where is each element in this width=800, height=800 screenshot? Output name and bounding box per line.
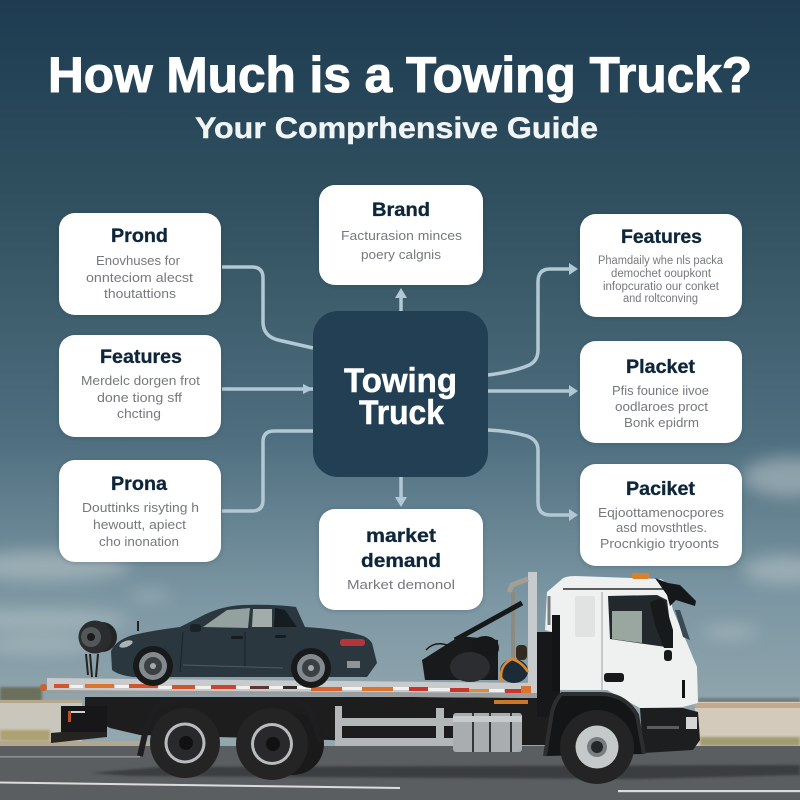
horizon: wall and scrub bbox=[0, 687, 800, 750]
connectors and arrows bbox=[222, 263, 578, 521]
panel: market demand: demand bbox=[361, 550, 441, 572]
panel: market demand: market bbox=[366, 525, 437, 547]
panel: Paciket: asd movsthtles. bbox=[616, 520, 707, 535]
front bumper bbox=[640, 708, 700, 753]
headboard post bbox=[509, 572, 537, 684]
panel: Paciket: Eqjoottamenocpores bbox=[598, 505, 725, 520]
panel: Prond: Enovhuses for bbox=[96, 253, 181, 268]
panel: Paciket: Paciket bbox=[626, 478, 695, 500]
panel: Features right: Features bbox=[621, 226, 702, 248]
center box: Towing Truck: Towing bbox=[344, 362, 457, 400]
panel: Features right: infopcuratio our conket bbox=[603, 281, 720, 293]
front wheel bbox=[560, 710, 634, 784]
subtitle: Your Comprhensive Guide bbox=[195, 112, 598, 145]
spare wheel on stand bbox=[78, 620, 139, 677]
panel: Prona: cho inonation bbox=[99, 534, 179, 549]
rear wheels bbox=[150, 708, 324, 780]
side guard bbox=[335, 706, 453, 746]
wheel arch bbox=[545, 694, 644, 756]
panel: Placket: Bonk epidrm bbox=[624, 415, 699, 430]
panel: Features left: Merdelc dorgen frot bbox=[81, 373, 200, 388]
panel: Prond: onnteciom alecst bbox=[86, 270, 193, 285]
fuel tank bbox=[453, 713, 522, 752]
cab bbox=[545, 576, 698, 708]
clouds bbox=[0, 457, 800, 652]
orange marks under deck bbox=[494, 700, 528, 704]
equipment on deck bbox=[422, 603, 528, 683]
cab window bbox=[608, 595, 690, 661]
panel: Prona: Prona bbox=[111, 473, 167, 495]
mirror arm bbox=[655, 578, 696, 606]
panel: Features left: chcting bbox=[117, 406, 161, 421]
panel: Features left: Features bbox=[100, 346, 182, 368]
panel: Brand bbox=[319, 185, 483, 285]
panel: Features right bbox=[580, 214, 742, 317]
chassis bbox=[85, 697, 560, 745]
panel: Brand: Facturasion minces bbox=[341, 228, 463, 243]
panel: Features left bbox=[59, 335, 221, 437]
panel: market demand bbox=[319, 509, 483, 610]
panel: Features right: Phamdaily whe nls packa bbox=[598, 255, 724, 267]
panel: Features right: and roltconving bbox=[623, 293, 698, 305]
panel: Placket: oodlaroes proct bbox=[615, 399, 708, 414]
roof beacon bbox=[632, 573, 649, 579]
panel: market demand: Market demonol bbox=[347, 577, 455, 592]
rear bumper bbox=[51, 706, 107, 743]
panel: Placket bbox=[580, 341, 742, 443]
road bbox=[0, 746, 800, 800]
panel: Prond: thoutattions bbox=[104, 286, 177, 301]
car bbox=[111, 605, 377, 688]
fender bbox=[140, 700, 321, 756]
panel: Paciket bbox=[580, 464, 742, 566]
panel: Paciket: Procnkigio tryoonts bbox=[600, 536, 720, 551]
flatbed deck bbox=[40, 678, 537, 698]
panel: Features left: done tiong sff bbox=[97, 390, 182, 405]
panel: Prona bbox=[59, 460, 221, 562]
panel: Placket: Pfis founice iivoe bbox=[612, 383, 709, 398]
panel: Placket: Placket bbox=[626, 356, 695, 378]
panel: Brand: poery calgnis bbox=[361, 247, 442, 262]
tow truck illustration bbox=[40, 572, 700, 784]
center box: Towing Truck: Truck bbox=[359, 394, 444, 432]
panel: Prona: hewoutt, apiect bbox=[93, 517, 186, 532]
panel: Prond bbox=[59, 213, 221, 315]
title: How Much is a Towing Truck? bbox=[48, 47, 752, 103]
cab back equipment bbox=[537, 632, 560, 717]
center box: Towing Truck bbox=[313, 311, 488, 477]
panel: Prond: Prond bbox=[111, 225, 168, 247]
panel: Brand: Brand bbox=[372, 199, 430, 221]
panel: Features right: demochet ooupkont bbox=[611, 268, 712, 280]
panel: Prona: Douttinks risyting h bbox=[82, 500, 199, 515]
